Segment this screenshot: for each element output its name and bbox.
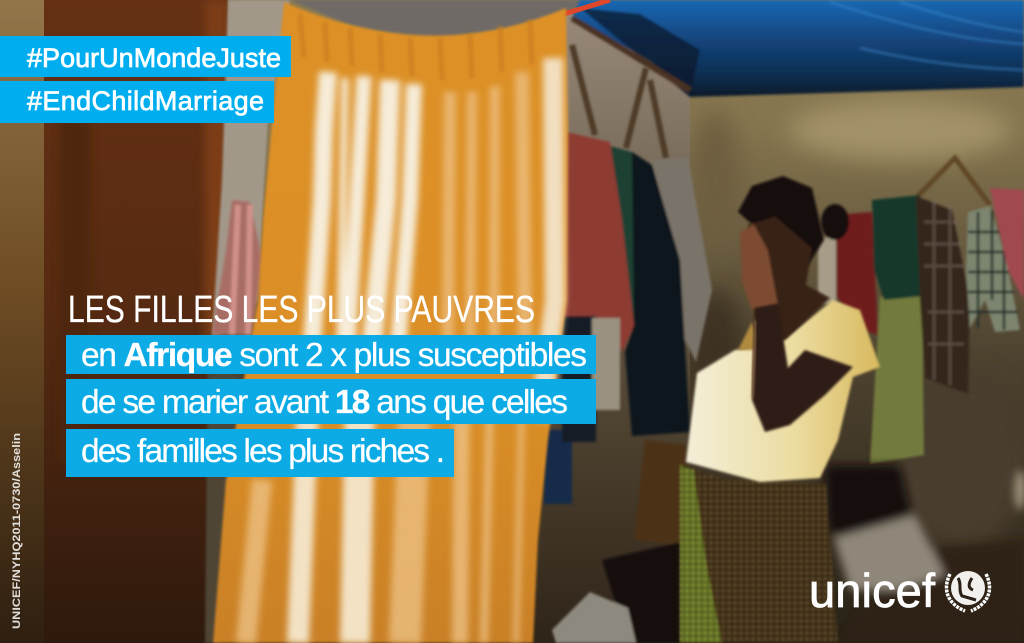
grey wall beside curtain: [212, 0, 290, 340]
arm: [752, 304, 853, 432]
raised hand: [740, 224, 778, 310]
dark plaid garment: [916, 196, 970, 394]
grey wall above curtain: [290, 0, 600, 42]
hashtag: PourUnMondeJuste: [0, 36, 291, 77]
curtain pale stripes: [246, 58, 555, 643]
pale cloth behind: [818, 238, 836, 304]
dark tarp corner: [580, 8, 700, 97]
checked shirt: [966, 206, 1020, 332]
red dress: [836, 212, 878, 335]
wreath left: [946, 574, 965, 611]
navy stripe: [562, 316, 596, 442]
hashtag box 1: [0, 36, 291, 77]
neckline shadow: [738, 322, 760, 350]
lower dark bundle: [602, 540, 690, 643]
hair: [738, 176, 824, 265]
right cream edge: [540, 58, 555, 420]
red garment: [562, 132, 634, 352]
unicef logo: [809, 564, 990, 617]
orange curtain: [213, 2, 568, 643]
arm highlight: [752, 320, 756, 398]
lower streaks: [298, 400, 360, 643]
pink cloth on wall: [212, 200, 263, 335]
hanger: [918, 158, 990, 205]
line 1 text: en Afrique sont 2 x plus susceptibles: [81, 337, 587, 374]
patterned bag: [634, 440, 686, 545]
wall mottling: [685, 100, 1024, 550]
hashtag: EndChildMarriage: [0, 81, 274, 123]
unicef wordmark: unicef: [809, 564, 936, 617]
white cloth: [592, 318, 620, 410]
pale garment: [652, 158, 712, 362]
olive skirt: [870, 296, 924, 464]
hashtag text 1: #PourUnMondeJuste: [27, 43, 281, 73]
statement line 1: [66, 335, 596, 374]
head and neck: [748, 216, 830, 340]
wood panel: [44, 0, 228, 643]
globe: [951, 571, 985, 605]
skirt olive edge: [680, 465, 722, 643]
line 2 text: de se marier avant 18 ans que celles: [81, 384, 568, 421]
white paper: [552, 592, 636, 643]
dark green garment: [610, 146, 646, 350]
upper white streaks: [312, 72, 414, 345]
photo credit: UNICEF/NYHQ2011-0730/Asselin: [11, 433, 23, 629]
hashtag box 2: [0, 81, 274, 123]
red rope: [564, 0, 610, 14]
navy garment: [625, 152, 690, 436]
black bun cloth: [821, 204, 849, 240]
green top: [872, 195, 924, 300]
dark pile: [825, 465, 915, 545]
plaid pattern: [924, 200, 964, 385]
white bundle: [834, 515, 945, 590]
middle wall behind clothes: [530, 10, 690, 643]
headline: LES FILLES LES PLUS PAUVRES: [68, 289, 535, 331]
line 1 box: [66, 335, 596, 374]
upper peach streaks: [448, 72, 525, 340]
shirt checks: [968, 210, 1018, 330]
clothes on right wall: [818, 158, 1024, 464]
hanging clothes: [544, 45, 712, 643]
wood shading: [60, 0, 228, 460]
skirt: [680, 465, 838, 643]
pink garment: [990, 188, 1024, 300]
line 3 box: [66, 429, 454, 477]
brackets: [572, 45, 666, 158]
line 3 text: des familles les plus riches .: [81, 433, 445, 470]
floor clutter: [825, 465, 1024, 643]
mother and child silhouette gaps: [958, 578, 976, 600]
brown bundle: [840, 540, 1024, 643]
unicef emblem: [946, 571, 990, 611]
wall beam: [572, 18, 690, 90]
statement line 3: [66, 429, 454, 477]
wreath right: [971, 574, 990, 611]
light edge right: [1015, 470, 1024, 510]
grey wall lower strip: [205, 335, 240, 643]
tarp highlights: [830, 2, 1024, 70]
line 2 box: [66, 379, 596, 424]
woman: [680, 176, 880, 643]
blue strip: [544, 430, 572, 504]
left post: [0, 0, 56, 643]
blue tarp ceiling: [572, 0, 1024, 97]
curtain gathered top pleats: [300, 14, 532, 80]
hashtag text 2: #EndChildMarriage: [27, 86, 264, 116]
statement line 2: [66, 379, 596, 424]
shirt: [686, 300, 880, 482]
